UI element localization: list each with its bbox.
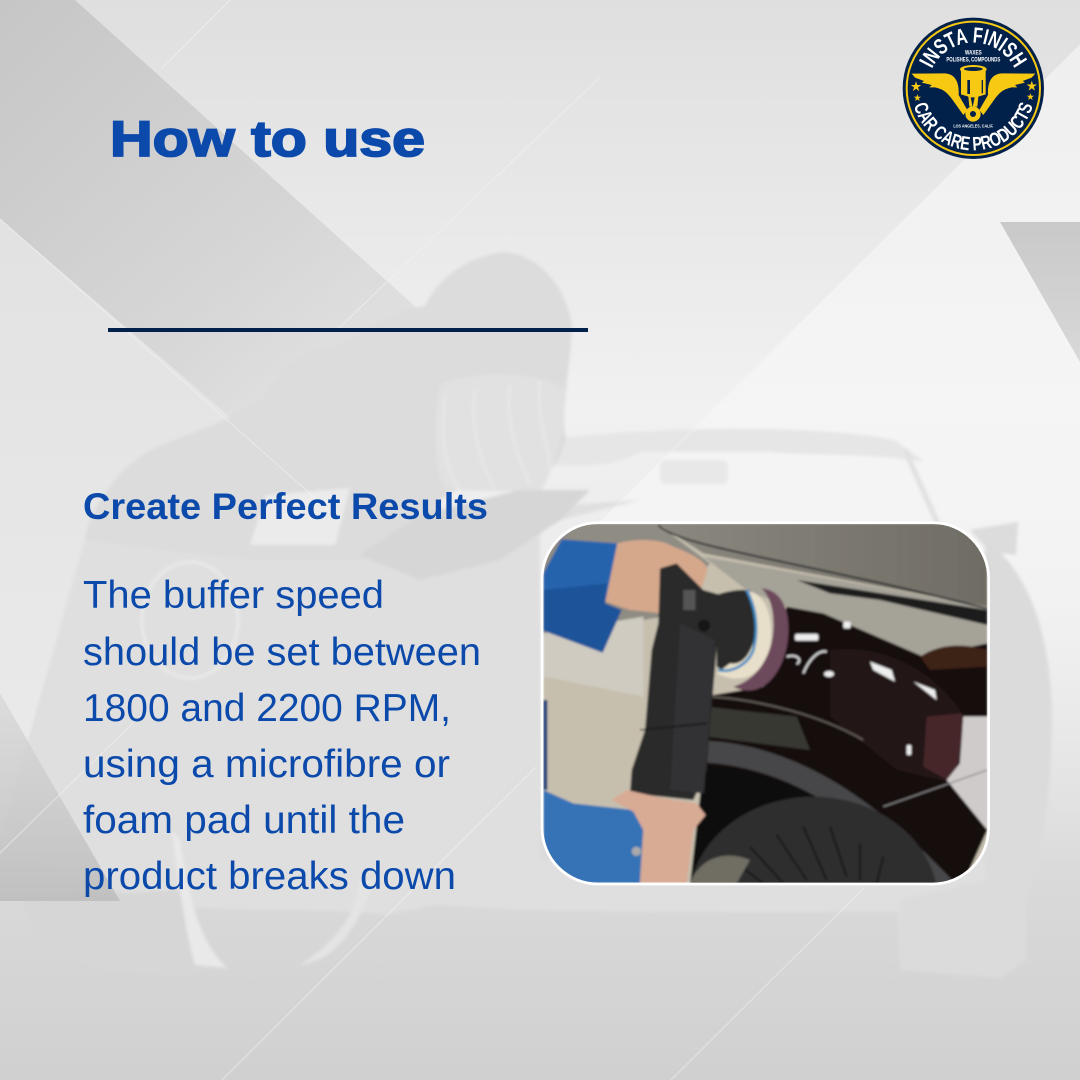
upper door panel bbox=[657, 523, 987, 607]
body text: 1800 and 2200 RPM, bbox=[83, 687, 451, 730]
logo small text bbox=[946, 49, 1001, 128]
foam layers bbox=[717, 590, 771, 679]
upper sleeve bbox=[543, 538, 618, 630]
polish marks bbox=[787, 622, 937, 755]
logo stars: ★ bbox=[913, 93, 922, 103]
logo stars: ★ bbox=[1026, 79, 1038, 94]
logo stars: ★ bbox=[1026, 92, 1035, 102]
upper background bbox=[543, 523, 710, 637]
logo stars: ★ bbox=[910, 79, 922, 94]
photo: hands polishing black car bbox=[540, 522, 990, 886]
buffer head bbox=[717, 590, 760, 677]
woman silhouette bbox=[84, 252, 590, 580]
logo small text: POLISHES, COMPOUNDS bbox=[946, 56, 1001, 63]
body text: should be set between bbox=[83, 631, 481, 674]
buffer body bbox=[630, 563, 727, 800]
tire bbox=[693, 794, 936, 883]
logo top arc text: INSTA FINISH bbox=[919, 27, 1028, 68]
lower hand bbox=[612, 790, 706, 883]
logo small text: LOS ANGELES, CALIF. bbox=[953, 123, 993, 128]
logo: Insta Finish badge bbox=[902, 18, 1044, 159]
upper hand bbox=[605, 540, 708, 613]
body text bbox=[83, 574, 481, 898]
dark car body bbox=[703, 607, 987, 883]
logo bottom arc text: CAR CARE PRODUCTS bbox=[914, 102, 1032, 150]
logo small text: WAXES bbox=[965, 49, 982, 56]
title: How to use bbox=[110, 111, 425, 167]
body text: The buffer speed bbox=[83, 574, 384, 617]
body text: foam pad until the bbox=[83, 799, 405, 842]
car silhouette bbox=[0, 429, 1052, 978]
diagonal band bbox=[0, 0, 530, 480]
wheel arch trim bbox=[707, 752, 943, 887]
body text: product breaks down bbox=[83, 855, 456, 898]
subheading: Create Perfect Results bbox=[83, 486, 488, 527]
logo wings and piston bbox=[912, 65, 1035, 122]
logo stars bbox=[910, 79, 1038, 103]
fender reflection bbox=[710, 697, 863, 740]
right triangle bbox=[1000, 222, 1080, 362]
purple pad bbox=[733, 588, 788, 690]
divider rule bbox=[108, 328, 588, 332]
body text: using a microfibre or bbox=[83, 743, 450, 786]
left triangle bbox=[0, 693, 120, 901]
wheel well bbox=[689, 766, 808, 882]
lower sleeve bbox=[543, 790, 643, 883]
